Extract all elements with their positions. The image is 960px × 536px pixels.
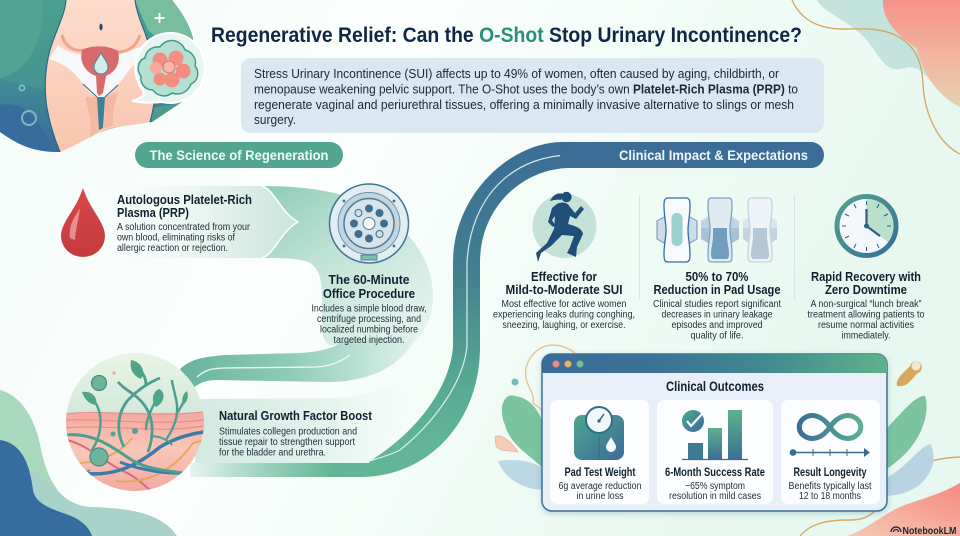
icon: pads: [657, 198, 777, 262]
metric: pad test weight: 6g average reduction: [558, 481, 642, 492]
pill heading: clinical impact: [560, 142, 824, 168]
text: recovery: A non-surgical “lunch break”: [810, 299, 922, 310]
text: recovery: Zero Downtime: [825, 282, 907, 297]
text: growth factor: for the bladder and urethra.: [219, 448, 326, 458]
text: 60-minute office procedure: [312, 272, 426, 346]
icon: blood drop: [61, 188, 105, 257]
intro panel: regenerate vaginal and periurethral tissues, offering a minimally invasive alternative to slings or mesh: [254, 97, 794, 112]
metric: six-month success rate: [657, 400, 773, 504]
title: Regenerative Relief: Can the O-Shot Stop Urinary Incontinence?: [211, 23, 802, 47]
metric: result longevity: Benefits typically last: [788, 481, 872, 492]
text: pad usage: Reduction in Pad Usage: [654, 282, 780, 297]
decoration: leaves around card: [495, 345, 934, 496]
text: PRP: Plasma (PRP): [117, 205, 189, 220]
icon: clock: [837, 196, 896, 256]
pill heading: the science of regeneration: The Science of Regeneration: [150, 148, 328, 163]
illustration: female pelvis with bladder: [0, 0, 193, 152]
text: effective: Effective for: [531, 269, 597, 284]
text: PRP: A solution concentrated from your: [117, 222, 251, 233]
intro panel: Stress Urinary Incontinence (SUI) affects up to 49% of women, often caused by aging, childbirth, or: [254, 66, 780, 81]
text: pad usage: 50% to 70%: [686, 269, 749, 284]
watermark: NotebookLM: [888, 522, 960, 536]
text: PRP: own blood, eliminating risks of: [117, 232, 235, 244]
metric: six-month success rate: resolution in mild cases: [669, 491, 761, 502]
text: PRP: allergic reaction or rejection.: [117, 243, 228, 254]
text: recovery: [808, 269, 925, 342]
metric: pad test weight: [550, 400, 649, 504]
column: reduction in pad usage: [653, 198, 781, 342]
card header: [542, 354, 887, 373]
metric: pad test weight: in urine loss: [576, 491, 624, 502]
text: pad usage: episodes and improved: [672, 320, 762, 331]
pill heading: the science of regeneration: [135, 142, 343, 168]
metric: result longevity: 12 to 18 months: [799, 491, 861, 502]
column: rapid recovery: [808, 196, 925, 342]
panel: clinical outcomes card: [542, 354, 887, 511]
text: recovery: resume normal activities: [818, 320, 914, 331]
illustration: tissue regeneration circle: [66, 353, 204, 491]
icon: bar chart with check: [682, 410, 748, 460]
decorative blob: top right: [792, 0, 960, 154]
text: effective: [493, 269, 635, 331]
text: growth factor: tissue repair to strengthen support: [219, 437, 355, 448]
text: PRP: Autologous Platelet-Rich: [117, 192, 252, 207]
panel: natural growth factor boost: [195, 377, 410, 463]
metric: six-month success rate: ~65% symptom: [685, 481, 745, 492]
text: 60-minute office procedure: localized numbing before: [320, 324, 418, 336]
intro panel: menopause weakening pelvic support. The O-Shot uses the body’s own Platelet-Rich Plasma (PRP) to: [254, 82, 798, 96]
text: effective: Most effective for active women: [502, 299, 626, 310]
text: growth factor: [219, 408, 373, 458]
text: 60-minute office procedure: Includes a simple blood draw,: [312, 304, 426, 314]
metric: result longevity: [781, 400, 880, 504]
icon: speech bubble with cell: [132, 33, 205, 103]
text: 60-minute office procedure: The 60-Minute: [328, 272, 410, 287]
text: recovery: treatment allowing patients to: [808, 310, 925, 320]
text: pad usage: quality of life.: [690, 330, 744, 342]
metric: six-month success rate: 6-Month Success Rate: [665, 467, 765, 479]
card title: Clinical Outcomes: [666, 379, 764, 394]
pill heading: clinical impact: Clinical Impact & Expectations: [619, 148, 808, 163]
icon: centrifuge: [330, 184, 408, 263]
text: 60-minute office procedure: centrifuge processing, and: [317, 314, 421, 325]
flow ribbon: connecting blue to green path: [190, 142, 811, 477]
text: growth factor: Stimulates collegen production and: [219, 426, 357, 438]
column: mild-to-moderate SUI: [493, 192, 635, 331]
text: recovery: immediately.: [842, 330, 890, 342]
metric: pad test weight: Pad Test Weight: [564, 467, 636, 479]
panel: autologous PRP: [61, 186, 298, 258]
text: growth factor: Natural Growth Factor Boost: [219, 408, 373, 423]
icon: runner: [532, 192, 596, 262]
text: effective: Mild-to-Moderate SUI: [506, 282, 622, 297]
text: pad usage: decreases in urinary leakage: [662, 310, 773, 320]
icon: weighing scale: [574, 407, 624, 460]
text: pad usage: [653, 269, 781, 342]
text: effective: sneezing, laughing, or exercise.: [502, 320, 626, 331]
text: 60-minute office procedure: Office Procedure: [323, 286, 415, 301]
decorative blob: bottom left: [0, 390, 177, 536]
text: effective: experiencing leaks during conghing,: [493, 310, 635, 320]
text: recovery: Rapid Recovery with: [811, 269, 921, 284]
decorative blob: bottom right: [800, 457, 960, 536]
text: 60-minute office procedure: targeted injection.: [334, 335, 404, 346]
icon: infinity and timeline: [790, 416, 870, 457]
intro panel: surgery.: [254, 112, 296, 127]
metric: result longevity: Result Longevity: [794, 467, 867, 479]
intro panel: [241, 58, 824, 133]
flow band: science path: [180, 186, 433, 388]
text: PRP: [117, 192, 252, 254]
text: pad usage: Clinical studies report significant: [653, 299, 781, 310]
